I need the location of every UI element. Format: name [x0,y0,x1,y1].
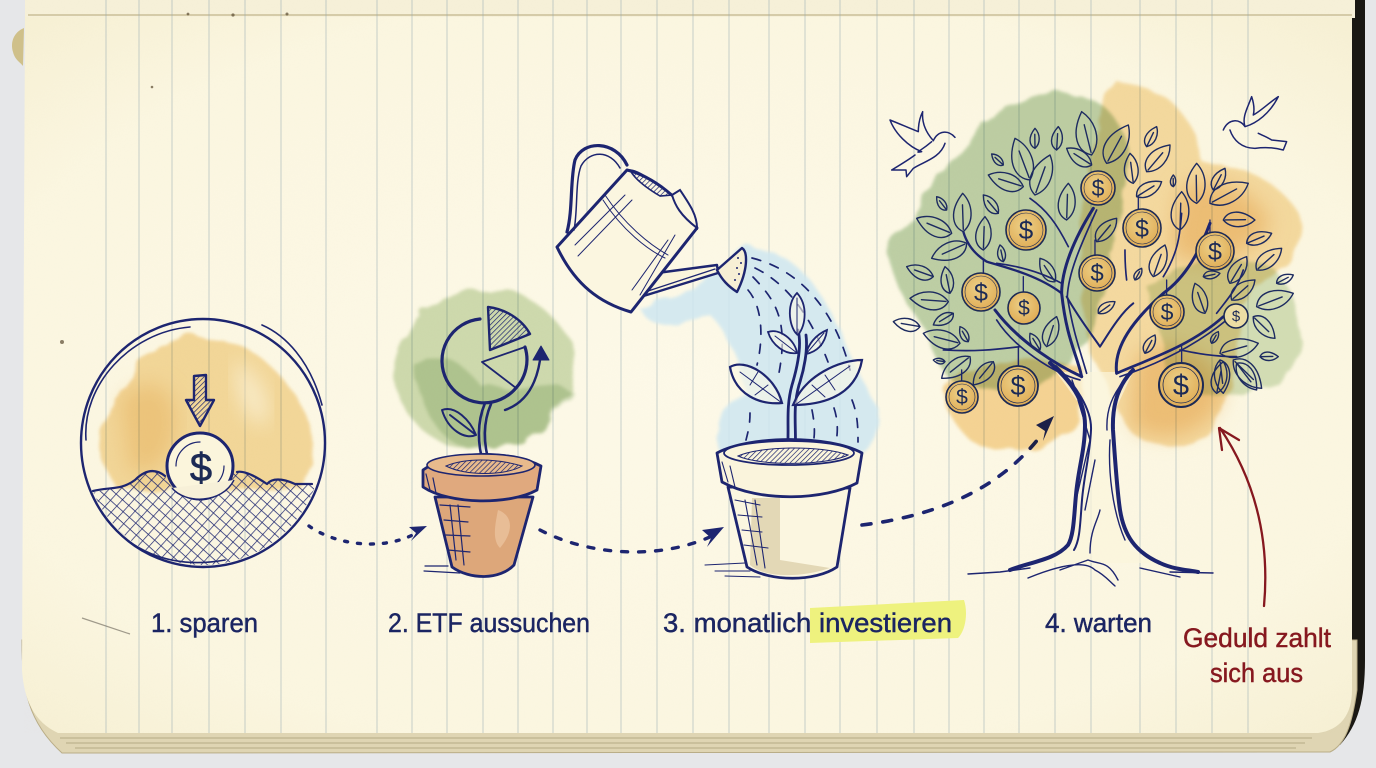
arrow: step 2 to 3 [540,527,724,552]
green watercolor wash [394,287,573,450]
red annotation text [1183,623,1331,688]
light patch [235,360,268,425]
arrow: step 3 to 4 [862,416,1054,525]
coins: $ [1173,370,1189,402]
step 4: money tree [889,85,1301,586]
coins: $ [1010,371,1026,401]
coins: $ [1019,215,1034,245]
fold line top [28,14,1352,16]
label 3: 3. monatlich investieren [663,608,952,638]
curved arrow [505,346,549,410]
stem and leaf [442,403,491,466]
coins: $ [1232,308,1241,325]
coins: $ [1161,299,1174,325]
torn paper edge left [12,28,24,66]
white pot [705,440,862,578]
coins: $ [1018,297,1030,320]
glass ball outline [81,319,325,567]
down arrow [186,375,214,426]
branches [943,197,1243,382]
soil fill with cross-hatching [90,471,315,570]
coins: $ [1092,175,1105,201]
paper specks [60,12,288,634]
bird left [890,112,955,177]
highlighter [810,600,966,643]
step 1: coin in soil [81,319,325,570]
small leaves beside lower right coin [1209,358,1263,395]
step 2: pot with pie chart [394,287,573,577]
terracotta pot [423,454,541,577]
label 2: 2. ETF aussuchen [388,608,590,638]
coin [167,433,233,499]
page stack bottom edge [22,640,1357,753]
ruled lines [106,0,1248,733]
orange watercolor wash [1080,85,1301,448]
top flap of notebook [25,0,1355,18]
coins: $ [956,386,968,409]
coins [946,171,1248,413]
orange watercolor wash lower left [944,359,1085,450]
soil hill line [93,471,312,491]
watering can [557,146,746,312]
green watercolor wash [889,92,1130,390]
arrow: step 1 to 2 [309,526,427,544]
deeper orange core [1130,182,1270,437]
leaves [892,110,1296,394]
coins: $ [974,279,988,307]
deeper green layer [415,357,572,450]
trunk and roots [968,363,1213,586]
label 1: 1. sparen [151,608,258,638]
coins: $ [1208,238,1222,266]
step 3: watering can and plant [557,146,880,578]
deeper orange patch [120,384,176,472]
plant [730,293,862,455]
red annotation text: sich aus [1210,658,1303,688]
bird right [1223,97,1287,150]
coin base soil [172,480,234,499]
water drops [746,258,858,442]
page stack lines [60,738,1312,748]
pie chart [442,307,530,403]
notebook spine shadow [1320,0,1365,745]
coins: $ [1090,260,1104,287]
coin: $ [190,446,212,490]
coins: $ [1135,215,1149,243]
blue watercolor wash [638,248,880,453]
orange watercolor wash [99,336,312,490]
label 4: 4. warten [1045,608,1152,638]
red annotation arrow [1219,428,1265,606]
red annotation text: Geduld zahlt [1183,623,1331,653]
green watercolor wash right [1150,258,1301,396]
